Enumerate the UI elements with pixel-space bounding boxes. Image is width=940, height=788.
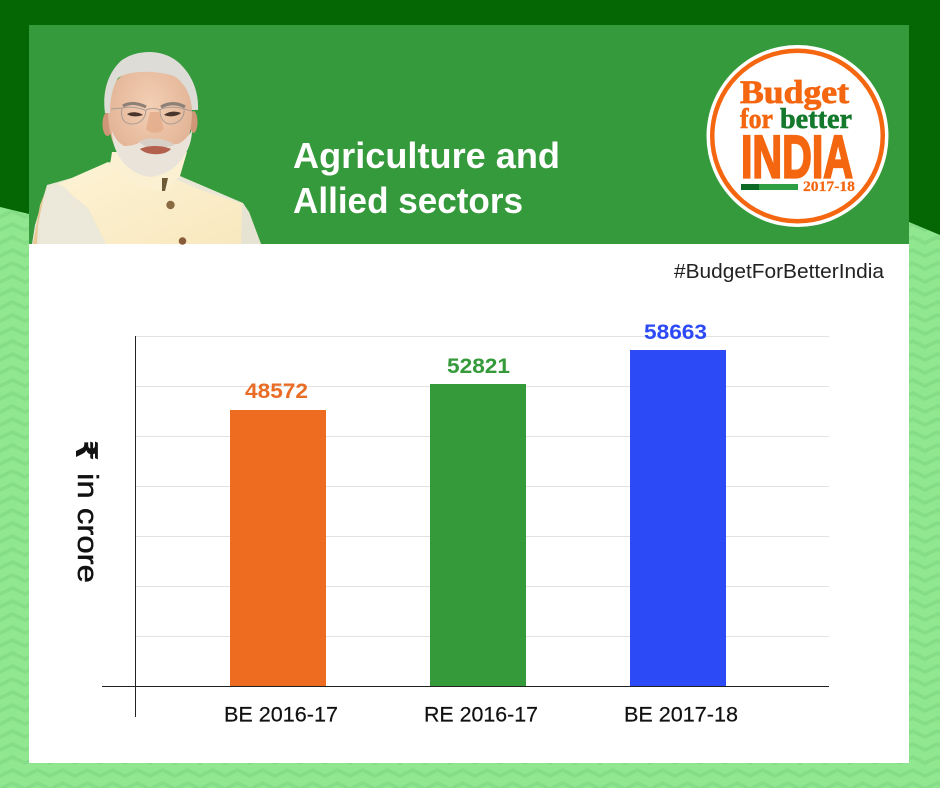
category labels: RE 2016-17 [424,704,538,726]
logo: Budget for better India badge: Budget [740,75,849,111]
logo: Budget for better India badge: 2017-18 [803,179,855,195]
value labels: 52821 [447,355,510,378]
y-axis label: in crore [71,473,103,583]
panel: white chart card [29,244,909,763]
bar: BE 2017-18 [630,350,726,686]
value labels [245,321,707,403]
portrait of man in cream vest [32,52,261,245]
bar: RE 2016-17 [430,384,526,686]
category labels: BE 2017-18 [624,704,738,726]
panel: green header banner [29,25,909,245]
bar: BE 2016-17 [230,410,326,686]
heading: Allied sectors [293,180,523,221]
logo: Budget for better India badge: INDIA [741,124,853,190]
category labels [224,704,738,726]
logo: Budget for better India badge [706,45,888,227]
value labels: 48572 [245,380,308,403]
heading [293,135,560,221]
logo: Budget for better India badge: for [740,103,773,135]
category labels: BE 2016-17 [224,704,338,726]
value labels: 58663 [644,321,707,344]
heading: Agriculture and [293,135,560,176]
bar chart [68,321,829,726]
y-axis label [68,440,103,583]
y-axis label: ₹ [68,440,103,461]
logo: Budget for better India badge: better [780,103,852,135]
hashtag: #BudgetForBetterIndia [674,261,885,283]
